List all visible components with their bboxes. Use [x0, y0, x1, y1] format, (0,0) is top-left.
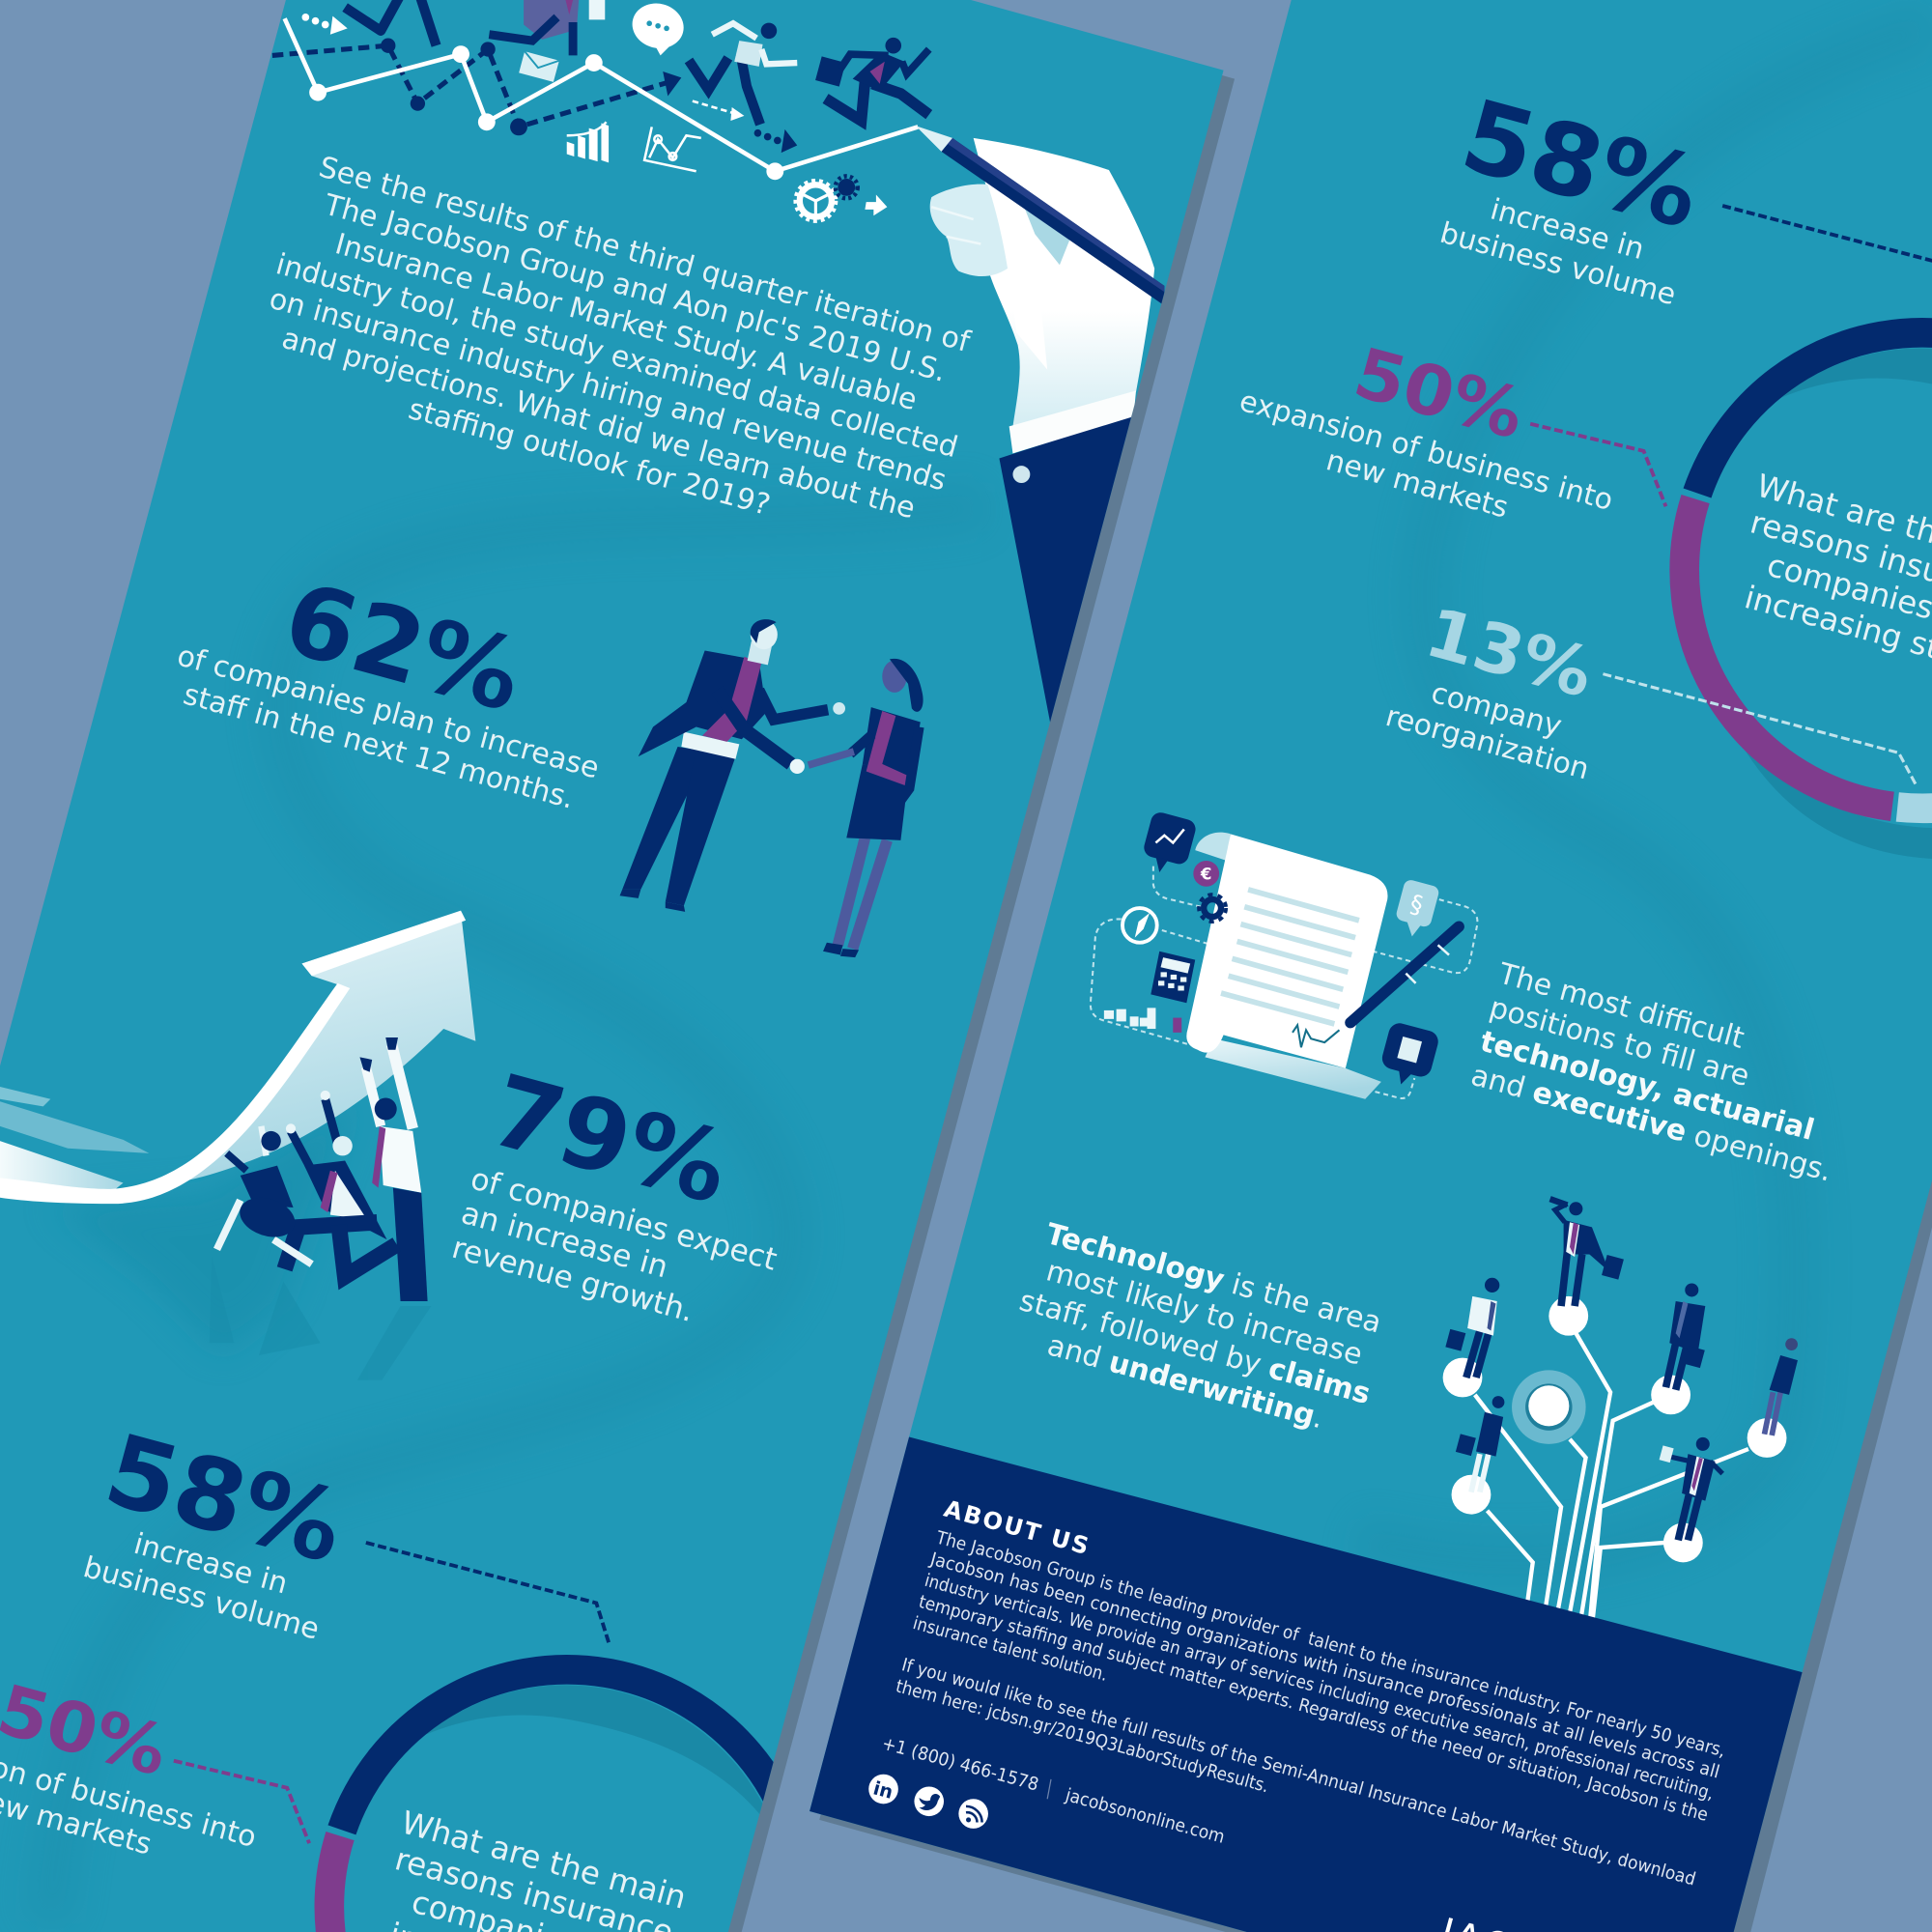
- panel: right page: [788, 0, 1932, 1932]
- stat: 58%: [1435, 78, 1717, 312]
- intro text: [270, 156, 974, 518]
- caption: revenue growth.: [448, 1231, 697, 1329]
- icon: gears: [796, 176, 858, 220]
- paper top curl: [1195, 833, 1233, 863]
- arrow shadow: [168, 1223, 263, 1293]
- stat: 58%: 58%: [1451, 78, 1712, 252]
- cuff: [1009, 390, 1136, 453]
- intro text: industry tool, the study examined data collected: [272, 247, 961, 465]
- caption: an increase in: [458, 1196, 671, 1285]
- dashed navy trend line: [272, 45, 671, 127]
- footer body: The Jacobson Group is the leading provider of talent to the insurance industry. For nearly 50 years,: [933, 1527, 1727, 1761]
- central ring: [1512, 1370, 1586, 1444]
- connector: 50%: [174, 1761, 309, 1843]
- arrow head top face: [301, 911, 466, 976]
- person: left man: [1445, 1278, 1499, 1378]
- stat: 50%: expansion of business into: [1236, 384, 1616, 518]
- illustration: big arrow with team: [0, 911, 475, 1380]
- footer body: insurance talent solution.: [911, 1613, 1110, 1686]
- arrow left shaft: [0, 1141, 124, 1193]
- icon: compass: [1122, 908, 1157, 943]
- arrow shards: [0, 1087, 50, 1106]
- background swirl: [49, 505, 985, 1922]
- man: [620, 619, 845, 912]
- footer panel: jacobsononline.com: [1063, 1785, 1227, 1848]
- dashed connectors: [1091, 867, 1477, 1098]
- stat: 13%: [1382, 588, 1623, 787]
- connector: 58%: [366, 1543, 609, 1642]
- team: kneeling man: [285, 1091, 397, 1276]
- runner two: [489, 0, 605, 55]
- arrow body: [111, 912, 475, 1190]
- illustration: hand holding pencil: [916, 126, 1164, 727]
- intro text: See the results of the third quarter iteration of: [315, 151, 975, 359]
- icon: rss: [958, 1799, 988, 1829]
- text: most difficult positions: The most difficult: [1494, 956, 1747, 1056]
- icon: chart bubble: [1142, 810, 1198, 872]
- icon: bar chart: [567, 122, 609, 162]
- illustration: top chart with runners: [272, 0, 929, 220]
- text: technology area: [1007, 1215, 1393, 1446]
- icon: euro tag: [1193, 861, 1219, 887]
- connector: 58%: [1722, 206, 1932, 305]
- team: standing man: [359, 1037, 428, 1301]
- caption: of companies expect: [467, 1161, 781, 1278]
- stat: 50%: new markets: [1322, 443, 1512, 526]
- illustration: handshake: [620, 619, 923, 957]
- text: most difficult positions: positions to fill are: [1486, 991, 1753, 1094]
- illustration: contract with icons: [1091, 810, 1477, 1099]
- circuit lines: [1475, 1333, 1748, 1627]
- donut chart: [1685, 332, 1932, 859]
- icon: gear: [1199, 895, 1226, 922]
- left page shadow: [11, 9, 1235, 1932]
- text: technology area: Technology is the area: [1042, 1217, 1385, 1341]
- paper sheet: [1186, 835, 1388, 1068]
- woman: [809, 659, 923, 957]
- person: right man: [1665, 1283, 1705, 1390]
- icon: calculator: [1151, 952, 1195, 1003]
- stat: 62%: staff in the next 12 months.: [180, 678, 578, 816]
- icon: small bars: [1104, 1008, 1181, 1033]
- icon: linkedin: in: [871, 1776, 895, 1804]
- icon: envelope: [519, 51, 559, 82]
- stat: 50%: [0, 1642, 281, 1888]
- intro text: and projections. What did we learn about the: [278, 322, 919, 526]
- pencil: [941, 138, 1164, 305]
- intro text: Insurance Labor Market Study. A valuable: [331, 227, 921, 417]
- text: technology area: most likely to increase: [1042, 1254, 1366, 1373]
- icon: euro tag: €: [1200, 866, 1211, 884]
- team reflections: [210, 1257, 431, 1380]
- person: right woman: [1765, 1338, 1798, 1435]
- icon: legal bubble: [1395, 878, 1440, 936]
- donut caption: [1723, 468, 1932, 687]
- stat: 58%: increase in: [130, 1527, 291, 1601]
- stat: 62%: [179, 587, 597, 808]
- runner three: [689, 23, 797, 125]
- person: lower right man: [1660, 1437, 1722, 1540]
- caption: [448, 1161, 781, 1347]
- stat: 50%: 50%: [1346, 332, 1532, 455]
- stat: 58%: [78, 1412, 360, 1647]
- stat: 79%: 79%: [479, 1053, 740, 1227]
- pen: [1350, 926, 1459, 1023]
- illustration: circuit tree with people: [1443, 1199, 1798, 1627]
- donut chart: [329, 1669, 805, 1932]
- nodes: [1443, 1296, 1786, 1562]
- footer heading: ABOUT US: [941, 1495, 1094, 1561]
- paper lines: [1221, 890, 1359, 1024]
- icon: line chart: [644, 127, 701, 171]
- text: most difficult positions: [1466, 956, 1863, 1189]
- text: most difficult positions: and executive openings.: [1467, 1059, 1835, 1189]
- stat: 58%: business volume: [80, 1550, 323, 1647]
- stat: 58%: increase in: [1487, 192, 1648, 267]
- stat: 13%: company: [1428, 676, 1565, 744]
- fingers: [930, 185, 1012, 276]
- footer body: Jacobson has been connecting organizations with insurance professionals at all levels across all: [927, 1548, 1721, 1783]
- signature: [1293, 1025, 1339, 1047]
- icon: speech bubble: [632, 4, 684, 56]
- icon: document bubble: [1379, 1021, 1440, 1084]
- arrow white edge: [0, 983, 350, 1204]
- panel: left page: [0, 0, 1282, 1932]
- person: binocular man: [1550, 1199, 1624, 1306]
- stat: 13%: 13%: [1417, 592, 1601, 713]
- text: technology area: and underwriting.: [1043, 1328, 1327, 1435]
- small arrows: [301, 14, 887, 215]
- stat: 62%: 62%: [272, 561, 533, 735]
- icon: twitter: [914, 1786, 944, 1816]
- intro text: on insurance industry hiring and revenue trends: [266, 282, 950, 497]
- palm: [974, 138, 1154, 426]
- intro text: The Jacobson Group and Aon plc's 2019 U.S.: [320, 187, 950, 389]
- footer body: If you would like to see the full results of the Semi-Annual Insurance Labor Market Study, download: [899, 1655, 1698, 1890]
- right page shadow: [819, 9, 1932, 1932]
- footer body: them here: jcbsn.gr/2019Q3LaborStudyResults.: [894, 1676, 1271, 1797]
- footer body: temporary staffing and subject matter experts. Regardless of the need or situation, Jacobson is the: [917, 1592, 1710, 1826]
- donut caption: What are the main: [397, 1804, 690, 1917]
- connector: 13%: [1603, 674, 1916, 784]
- person: lower left woman: [1456, 1396, 1504, 1492]
- footer body: industry verticals. We provide an array of services including executive search, professional recruiting,: [923, 1571, 1716, 1804]
- stat: 50%: [1227, 305, 1638, 552]
- footer panel: [810, 1436, 1848, 1932]
- sleeve: [999, 412, 1140, 727]
- stat: 62%: of companies plan to increase: [174, 639, 603, 785]
- text: most difficult positions: technology, actuarial: [1477, 1025, 1818, 1148]
- connector: 50%: [1530, 424, 1665, 506]
- intro text: staffing outlook for 2019?: [405, 392, 774, 523]
- footer body: [893, 1527, 1732, 1912]
- stat: 58%: business volume: [1436, 216, 1679, 312]
- runner one: [345, 0, 437, 45]
- contact line: +1 (800) 466-1578: [880, 1734, 1040, 1796]
- stat: 58%: 58%: [94, 1412, 355, 1586]
- icon: legal bubble: §: [1406, 890, 1426, 921]
- background swirl: [1355, 25, 1932, 1561]
- stat: 13%: reorganization: [1382, 699, 1593, 787]
- paper bottom roll: [1205, 1038, 1381, 1099]
- white trend line: [285, 18, 918, 171]
- text: technology area: staff, followed by claims: [1016, 1284, 1374, 1411]
- stat: 79%: [448, 1052, 810, 1347]
- runner four: [815, 38, 929, 121]
- team: crouching woman: [216, 1126, 312, 1264]
